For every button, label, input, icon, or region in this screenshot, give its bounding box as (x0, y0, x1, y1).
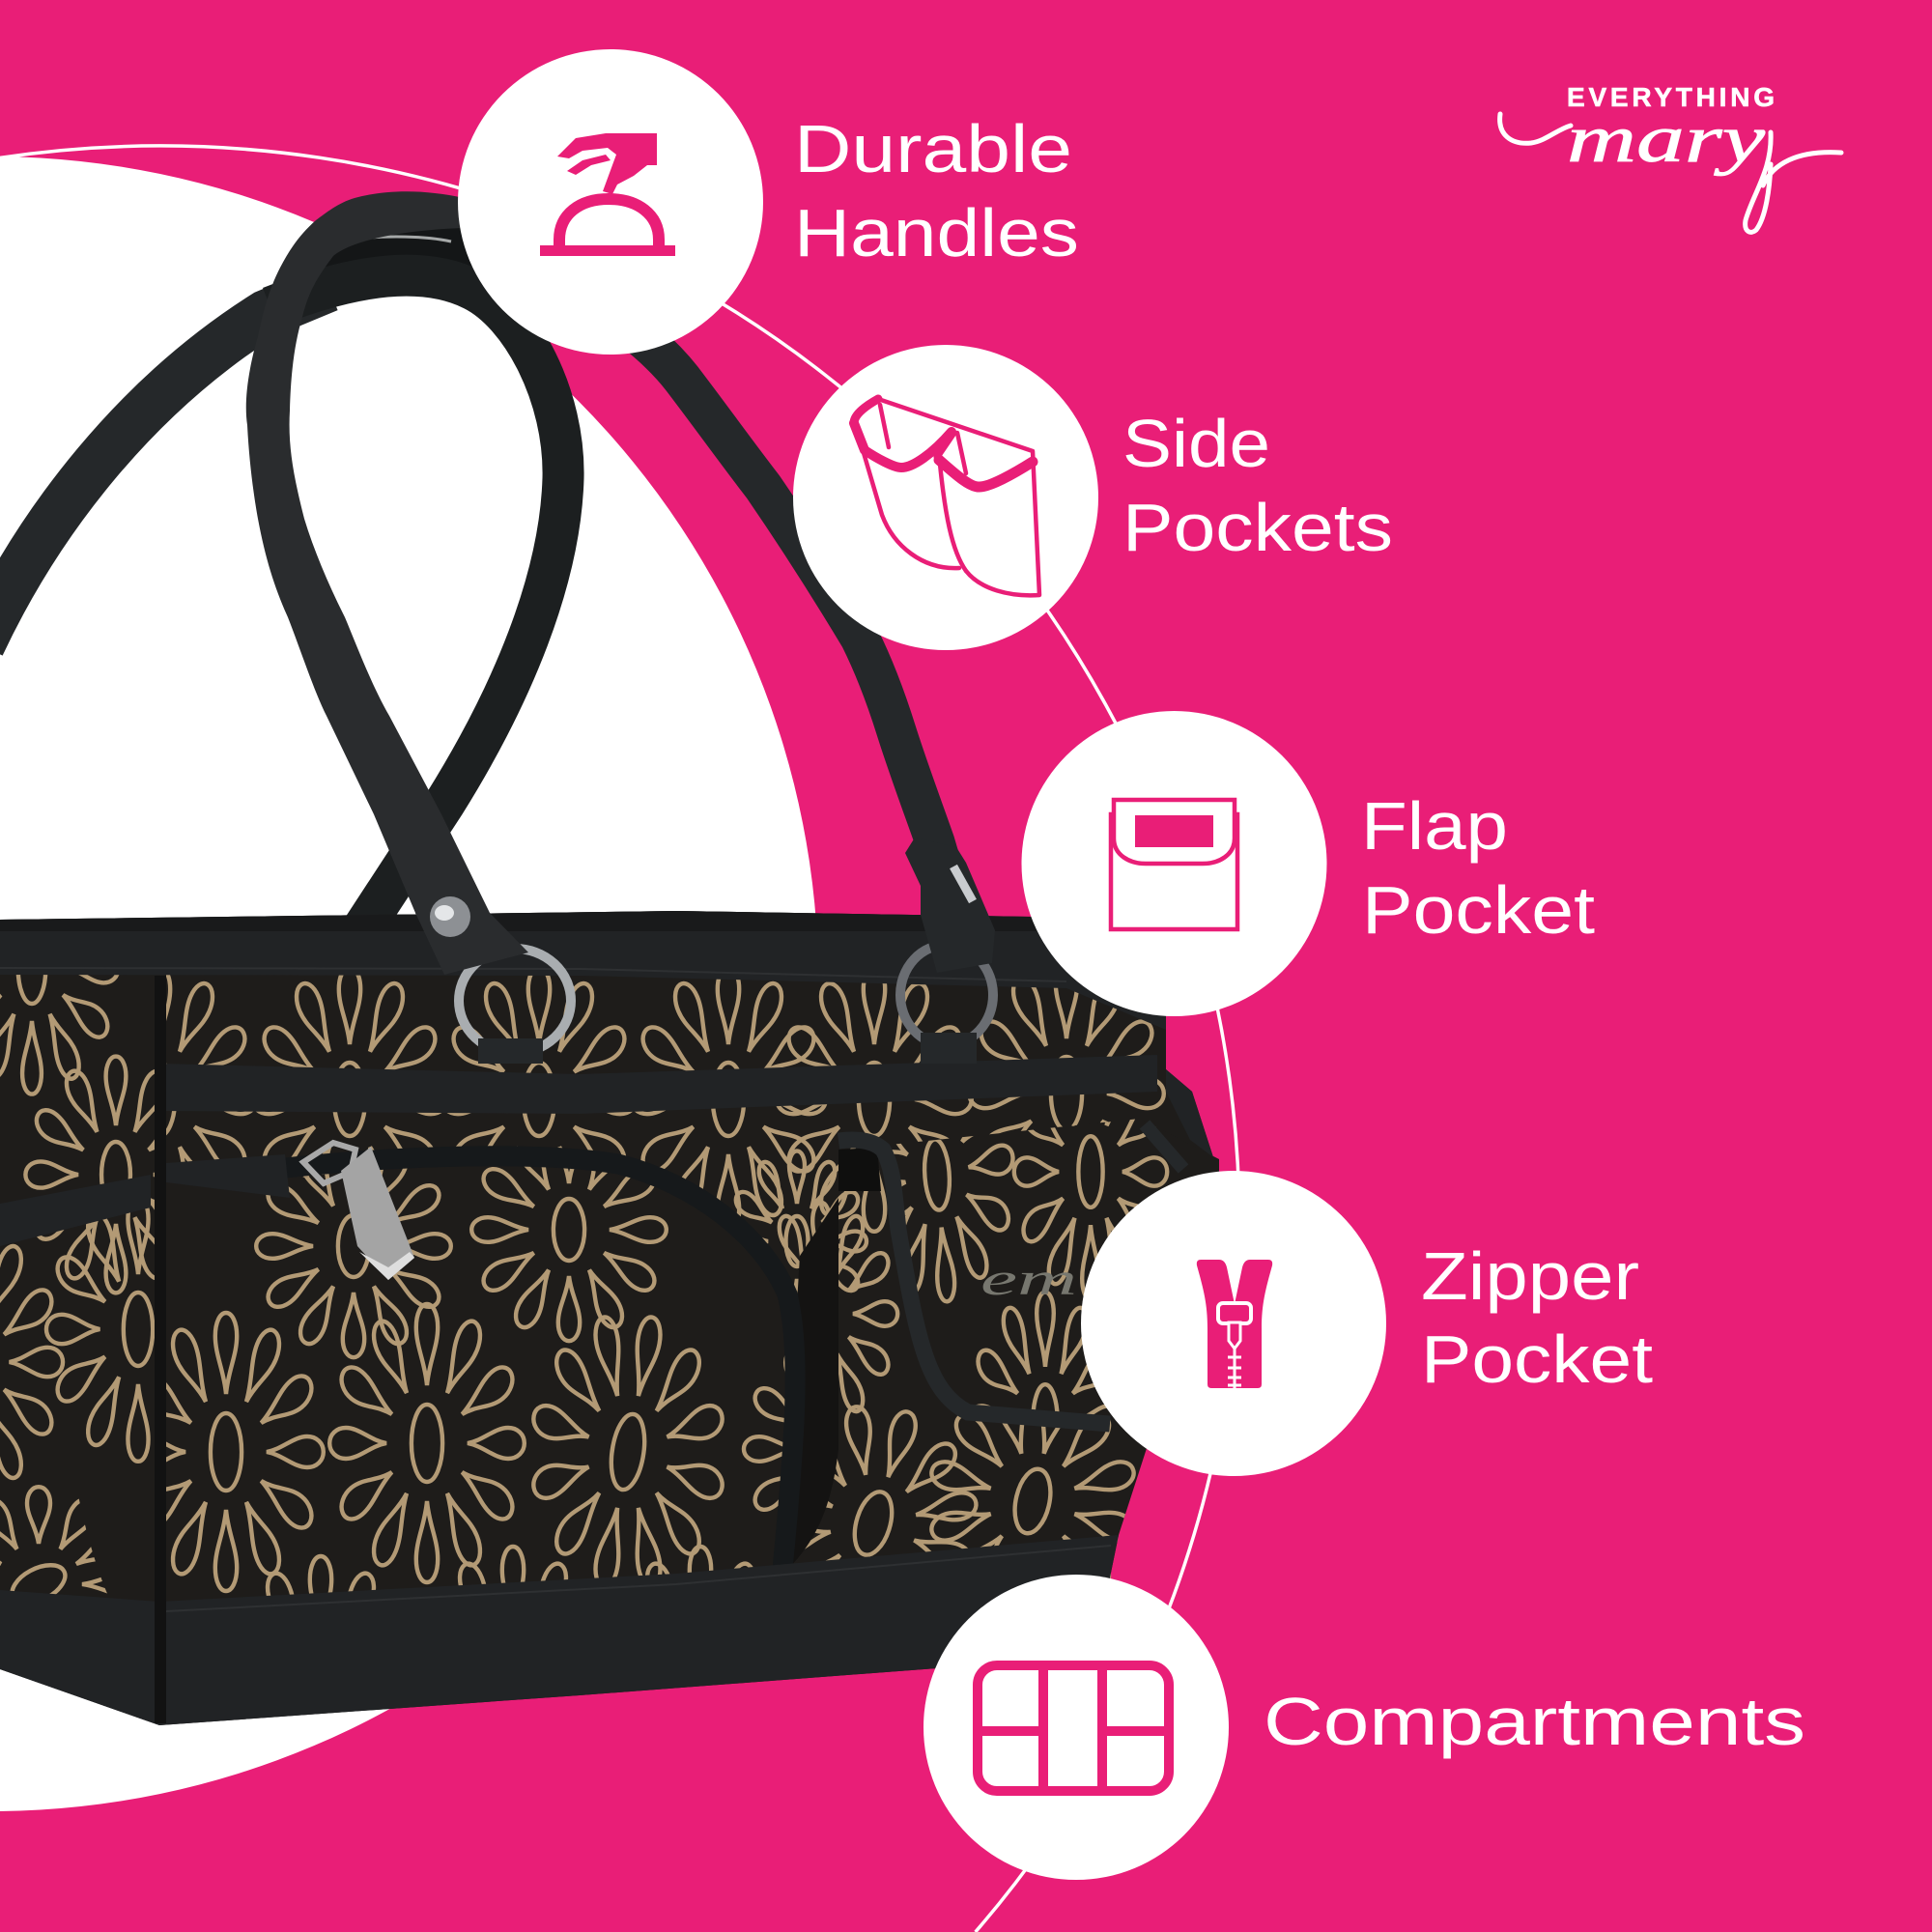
shadow gap between pockets (781, 1198, 838, 1575)
white backdrop circle (0, 156, 818, 1811)
front handle loop (246, 191, 563, 975)
feature circle: zipper pocket (1081, 1171, 1386, 1476)
label: side pockets: Pockets (1122, 490, 1393, 565)
brand logo: EVERYTHING (1567, 82, 1775, 112)
label: durable handles: Handles (794, 195, 1079, 270)
brand logo: mary (1567, 102, 1766, 177)
label: compartments: Compartments (1264, 1684, 1805, 1759)
label: flap pocket (1361, 788, 1595, 948)
feature circle: compartments (923, 1575, 1229, 1880)
brand logo (1500, 82, 1841, 232)
icon: side pockets (854, 399, 1039, 595)
bag trim bands (0, 911, 1213, 1725)
left strap end (415, 913, 528, 975)
label: durable handles: Durable (794, 111, 1072, 186)
feature circle: flap pocket (1022, 711, 1327, 1016)
feature circle: side pockets (793, 345, 1098, 650)
right strap tab (905, 838, 995, 973)
feature circle: durable handles (458, 49, 763, 355)
connecting arc line (0, 146, 1239, 1932)
label: flap pocket: Pocket (1362, 872, 1595, 948)
zipper pocket (166, 1146, 806, 1596)
flap pocket (838, 1119, 1219, 1432)
label: flap pocket: Flap (1361, 788, 1508, 864)
back handle (0, 288, 952, 898)
zipper pull (303, 1143, 414, 1280)
label: zipper pocket: Zipper (1421, 1238, 1639, 1314)
embroidered logo on flap: em (980, 1254, 1077, 1305)
product photo: tote bag (0, 191, 1219, 1834)
metal rings (459, 945, 993, 1053)
icon: hand on bell (540, 133, 675, 256)
label: side pockets (1122, 406, 1393, 565)
floral print: left panel (0, 975, 155, 1594)
label: side pockets: Side (1122, 406, 1270, 481)
icon: flap pocket (1111, 800, 1237, 929)
rivet (430, 896, 470, 937)
label: durable handles (794, 111, 1079, 270)
floral print: front panel (62, 961, 1164, 1675)
label: zipper pocket: Pocket (1421, 1321, 1653, 1397)
label: zipper pocket (1421, 1238, 1653, 1397)
icon: compartments (978, 1665, 1169, 1791)
icon: zipper (1197, 1260, 1272, 1388)
bag silhouette (0, 911, 1213, 1725)
strap tabs and hardware (303, 838, 995, 1280)
